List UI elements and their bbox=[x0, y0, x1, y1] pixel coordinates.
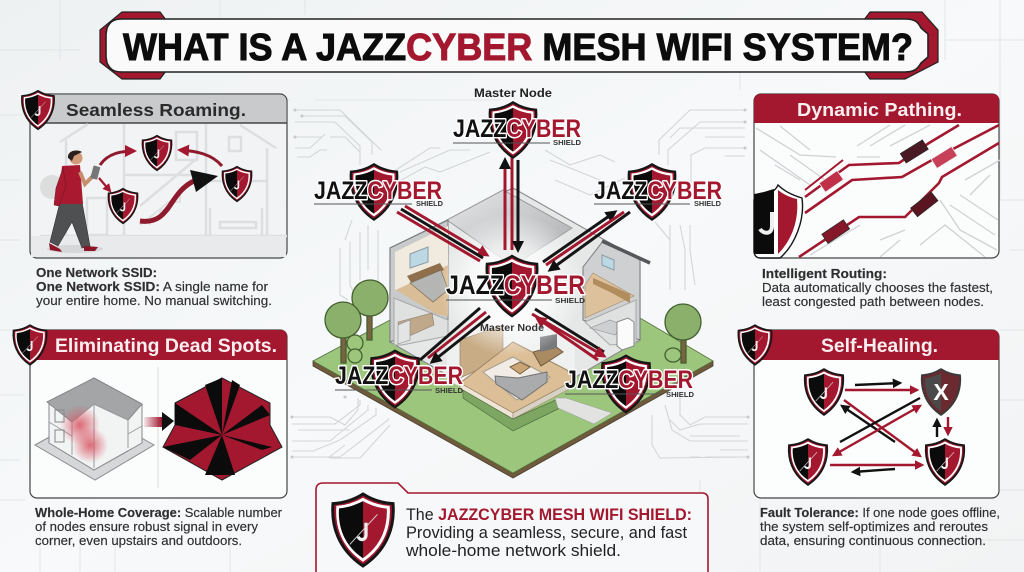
caption: whole-home coverage: Whole-Home Coverage: Scalable number bbox=[35, 505, 283, 520]
logo node: left: JAZZCYBER bbox=[314, 177, 442, 205]
caption: fault tolerance: the system self-optimizes and reroutes bbox=[760, 519, 989, 534]
summary text: Providing a seamless, secure, and fast bbox=[406, 523, 687, 542]
master node label centre: Master Node bbox=[480, 322, 544, 334]
failed node: X bbox=[933, 379, 949, 405]
living room bbox=[447, 300, 575, 413]
trees bbox=[325, 280, 701, 363]
white glow behind central node bbox=[440, 213, 584, 357]
caption: seamless roaming: One Network SSID: bbox=[36, 265, 157, 280]
logo node: lower right: SHIELD bbox=[666, 392, 694, 399]
kitchen lower left bbox=[394, 298, 448, 345]
panel: eliminating dead spots bbox=[30, 330, 287, 498]
shield nodes bbox=[142, 136, 172, 170]
heading: Dynamic Pathing. bbox=[797, 100, 962, 120]
left wall section bbox=[390, 220, 448, 342]
caption: seamless roaming: your entire home. No manual switching. bbox=[36, 293, 272, 308]
summary text: whole-home network shield. bbox=[405, 541, 621, 560]
failed node bbox=[922, 369, 960, 415]
data link arrows: lower left node to centre bbox=[420, 308, 490, 362]
icon: shield badge seamless roaming bbox=[22, 91, 54, 129]
data link arrows: right node to centre bbox=[543, 212, 630, 270]
heading: Self-Healing. bbox=[821, 336, 938, 357]
lower right room bbox=[585, 300, 636, 345]
title banner bbox=[100, 12, 938, 79]
icon: shield badge dead spots bbox=[13, 325, 47, 365]
logo node: lower right bbox=[565, 356, 694, 412]
isometric house on lawn bbox=[313, 188, 713, 478]
roaming arrows bbox=[99, 150, 222, 221]
router chips bbox=[819, 140, 957, 243]
caption: whole-home coverage: of nodes ensure robust signal in every bbox=[35, 519, 259, 534]
house outline backdrop bbox=[40, 124, 287, 236]
caption: seamless roaming: One Network SSID: A single name for bbox=[36, 279, 269, 294]
panel: dynamic pathing bbox=[754, 94, 1000, 258]
caption: intelligent routing: Intelligent Routing: bbox=[762, 266, 887, 281]
logo node: top: JAZZCYBER bbox=[453, 115, 581, 143]
reroute arrows bbox=[830, 383, 948, 472]
summary text bbox=[405, 505, 692, 560]
house shell bbox=[390, 188, 640, 413]
logo node: right bbox=[594, 164, 722, 220]
caption: fault tolerance: data, ensuring continuous connection. bbox=[760, 533, 986, 548]
grey circuit traces bbox=[756, 125, 1000, 257]
panel: seamless roaming bbox=[30, 94, 287, 258]
logo node: left: SHIELD bbox=[416, 201, 443, 208]
right gable room bbox=[583, 241, 640, 340]
data link arrows: left node to centre bbox=[397, 206, 487, 261]
hedge bbox=[463, 390, 560, 431]
caption: fault tolerance: Fault Tolerance: If one node goes offline, bbox=[760, 505, 1000, 520]
icon: shield with J bbox=[754, 185, 803, 258]
path bbox=[555, 398, 612, 424]
logo node: centre: JAZZCYBER bbox=[446, 270, 585, 300]
arrow between houses bbox=[144, 412, 174, 431]
caption: intelligent routing: Data automatically chooses the fastest, bbox=[762, 280, 993, 295]
panel: mesh wifi shield summary bbox=[316, 483, 708, 572]
panel: self-healing bbox=[754, 330, 999, 498]
logo node: right: JAZZCYBER bbox=[594, 177, 722, 205]
logo node: lower left: JAZZCYBER bbox=[335, 362, 463, 390]
lawn bbox=[313, 361, 713, 478]
heading: Seamless Roaming. bbox=[66, 100, 246, 120]
caption: intelligent routing: least congested path between nodes. bbox=[762, 294, 984, 309]
logo node: top: SHIELD bbox=[553, 140, 581, 147]
heading: Eliminating Dead Spots. bbox=[55, 336, 277, 357]
house with dead spots bbox=[35, 378, 154, 480]
person with phone bbox=[49, 150, 100, 252]
caption: seamless roaming bbox=[36, 265, 272, 308]
mesh covered house bbox=[163, 378, 282, 480]
node shields bbox=[805, 369, 843, 415]
logo node: left bbox=[314, 164, 443, 220]
logo node: right: SHIELD bbox=[694, 201, 721, 208]
logo node: lower left bbox=[335, 351, 463, 407]
logo node: centre: SHIELD bbox=[555, 298, 585, 305]
circuit traces around the house bbox=[290, 108, 750, 458]
summary text: The JAZZCYBER MESH WIFI SHIELD: bbox=[406, 505, 692, 524]
icon: shield badge self-healing bbox=[738, 325, 772, 365]
caption: fault tolerance bbox=[760, 505, 1000, 548]
caption: whole-home coverage bbox=[35, 505, 283, 548]
logo node: lower right: JAZZCYBER bbox=[565, 366, 693, 394]
red routed paths bbox=[799, 125, 999, 257]
logo node: top bbox=[453, 102, 581, 158]
caption: whole-home coverage: corner, even upstairs and outdoors. bbox=[35, 533, 242, 548]
icon: large shield bbox=[333, 494, 393, 566]
data link arrows: top node to centre bbox=[505, 155, 518, 250]
bedroom bbox=[395, 226, 448, 290]
master node label top: Master Node bbox=[474, 88, 552, 100]
logo node: centre bbox=[446, 256, 585, 316]
caption: intelligent routing bbox=[762, 266, 993, 309]
logo node: lower left: SHIELD bbox=[435, 388, 463, 395]
title text: WHAT IS A JAZZCYBER MESH WIFI SYSTEM? bbox=[123, 27, 913, 69]
data link arrows: lower right node to centre bbox=[532, 309, 604, 360]
